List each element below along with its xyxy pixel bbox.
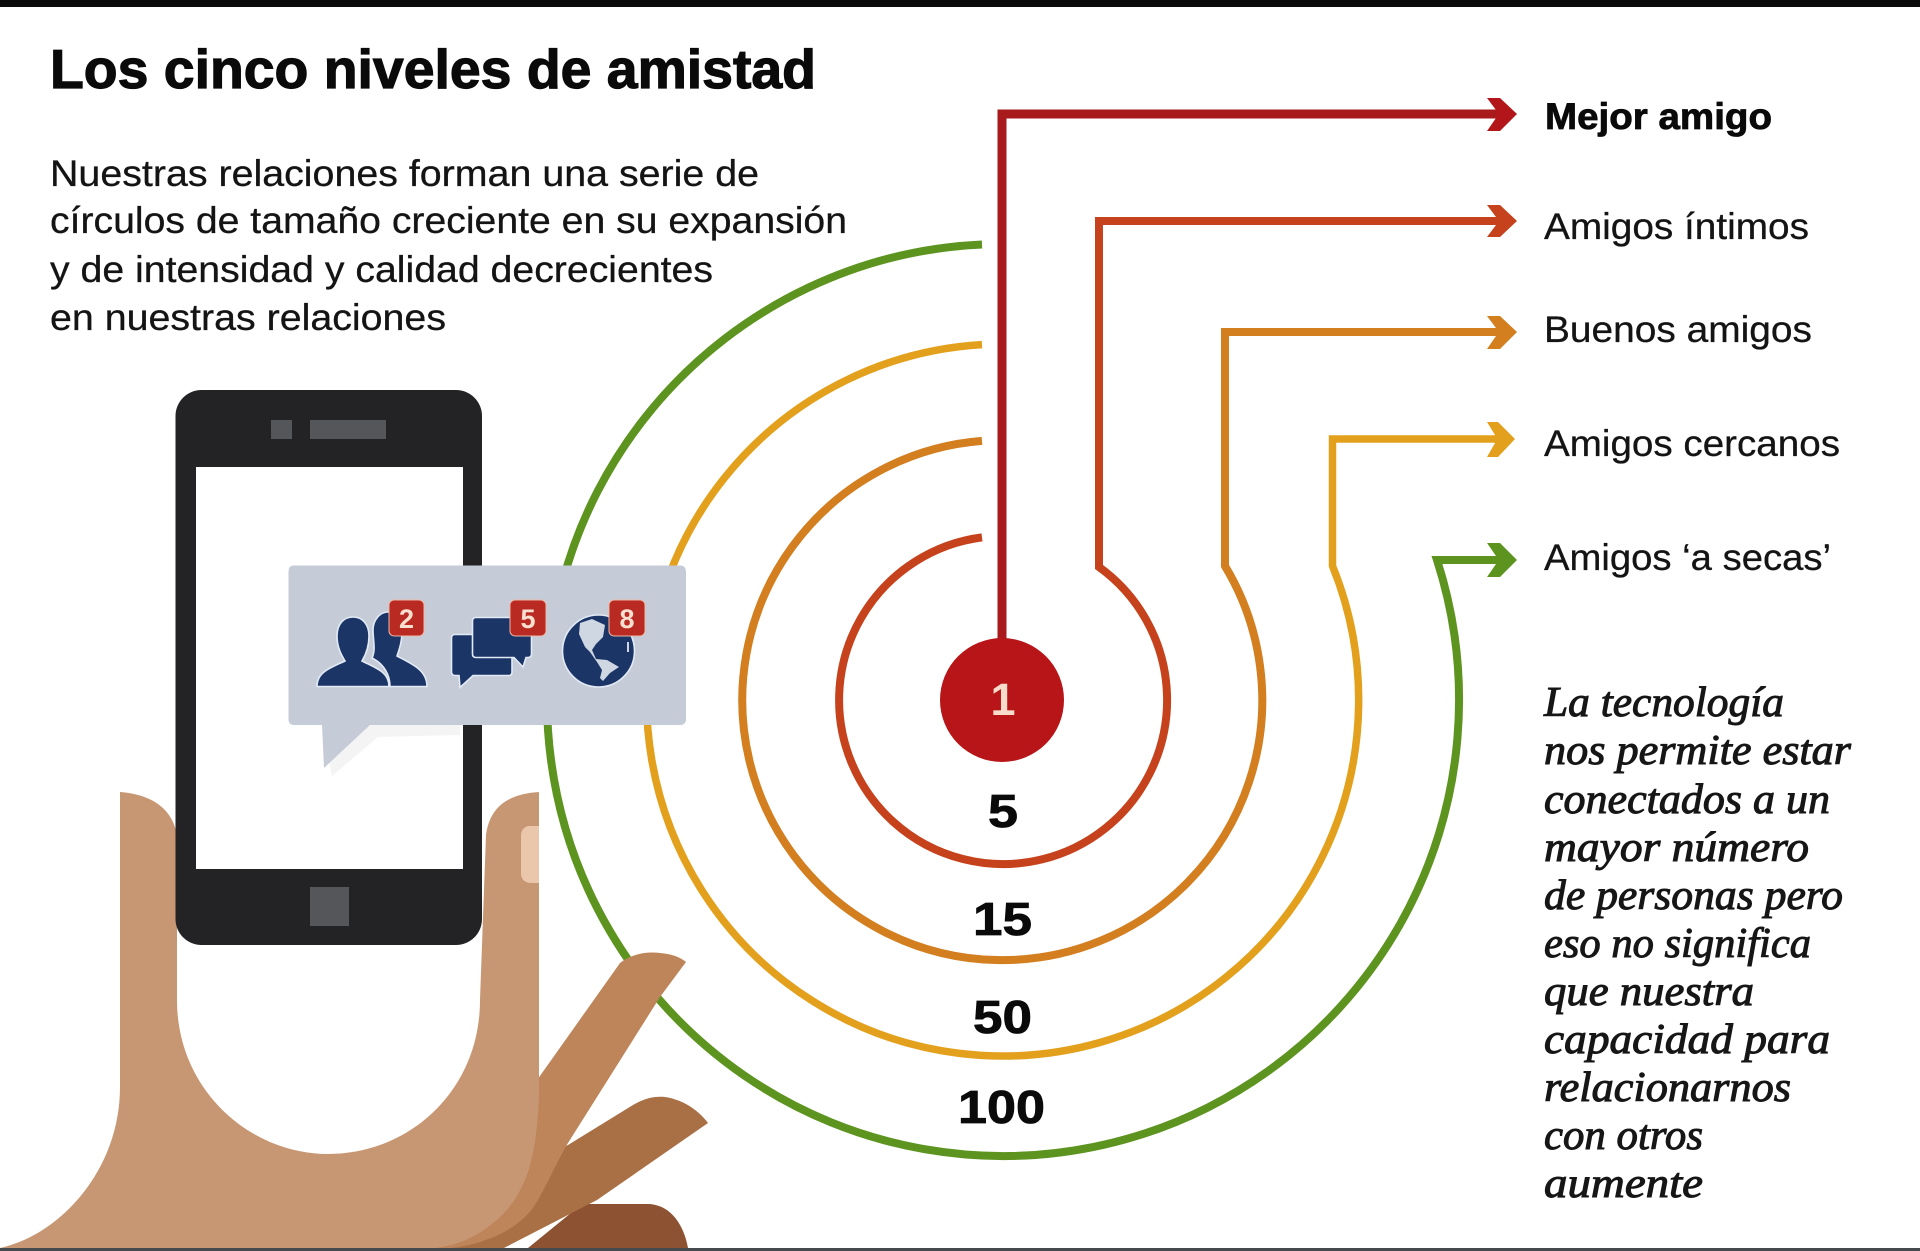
notification bubble xyxy=(288,566,686,776)
phone screen xyxy=(196,467,463,869)
badge: 5 xyxy=(510,600,546,636)
italic note: conectados a un xyxy=(1544,777,1830,823)
intro text xyxy=(50,153,847,338)
ring numbers: 100 xyxy=(958,1081,1045,1133)
italic note: capacidad para xyxy=(1544,1017,1830,1063)
italic note: con otros xyxy=(1544,1113,1703,1159)
phone home button xyxy=(310,887,349,926)
intro text: círculos de tamaño creciente en su expansión xyxy=(50,200,847,241)
center circle with 1 xyxy=(940,638,1064,762)
italic note: relacionarnos xyxy=(1544,1065,1791,1111)
italic note: de personas pero xyxy=(1544,873,1843,919)
center circle with 1: 1 xyxy=(990,674,1016,725)
intro text: en nuestras relaciones xyxy=(50,297,446,338)
italic note: mayor número xyxy=(1544,825,1809,871)
ring numbers: 15 xyxy=(973,893,1032,945)
friend level labels: Amigos cercanos xyxy=(1544,423,1840,464)
upper finger xyxy=(400,952,686,1248)
badge: 2 xyxy=(389,600,424,636)
italic note: La tecnología xyxy=(1543,680,1784,726)
italic note: que nuestra xyxy=(1544,969,1754,1015)
intro text: Nuestras relaciones forman una serie de xyxy=(50,153,759,194)
badge: 8: 8 xyxy=(619,604,635,634)
intro text: y de intensidad y calidad decrecientes xyxy=(50,249,713,290)
phone speaker xyxy=(271,420,386,439)
hand holding phone xyxy=(0,792,708,1248)
badge: 5: 5 xyxy=(520,604,536,634)
ring: 5 amigos intimos xyxy=(839,205,1517,864)
ring: 100 amigos a secas xyxy=(547,244,1517,1156)
italic note: eso no significa xyxy=(1544,921,1811,967)
bottom rule xyxy=(0,1248,1920,1251)
friend level labels: Amigos ‘a secas’ xyxy=(1544,537,1831,578)
friend level labels: Mejor amigo xyxy=(1545,96,1772,137)
icon: messages xyxy=(452,618,532,688)
friend level labels: Buenos amigos xyxy=(1544,309,1812,350)
continents xyxy=(579,619,629,681)
friend level labels xyxy=(1544,96,1840,578)
bubble body xyxy=(288,566,686,768)
second finger xyxy=(440,1097,708,1248)
third finger xyxy=(528,1204,688,1248)
ring numbers: 50 xyxy=(973,991,1032,1043)
badge: 8 xyxy=(609,600,645,636)
icon: friends xyxy=(317,612,427,686)
ring: 15 buenos amigos xyxy=(742,316,1517,960)
title: Los cinco niveles de amistad xyxy=(50,38,816,100)
friendship rings and arrows xyxy=(547,98,1517,1156)
ring: 50 amigos cercanos xyxy=(647,345,1515,1056)
italic note: nos permite estar xyxy=(1544,728,1852,774)
bubble shadow xyxy=(322,725,460,776)
badge: 2: 2 xyxy=(399,604,414,634)
italic note xyxy=(1543,680,1852,1207)
palm and grip fingers xyxy=(0,792,539,1248)
line: mejor amigo xyxy=(1002,98,1517,640)
icon: globe xyxy=(562,615,634,687)
ring numbers: 5 xyxy=(988,785,1018,837)
thumbnail xyxy=(521,826,539,883)
phone xyxy=(176,390,482,945)
italic note: aumente xyxy=(1544,1161,1703,1207)
top bar xyxy=(0,0,1920,7)
ring numbers xyxy=(958,785,1045,1133)
friend level labels: Amigos íntimos xyxy=(1544,206,1809,247)
